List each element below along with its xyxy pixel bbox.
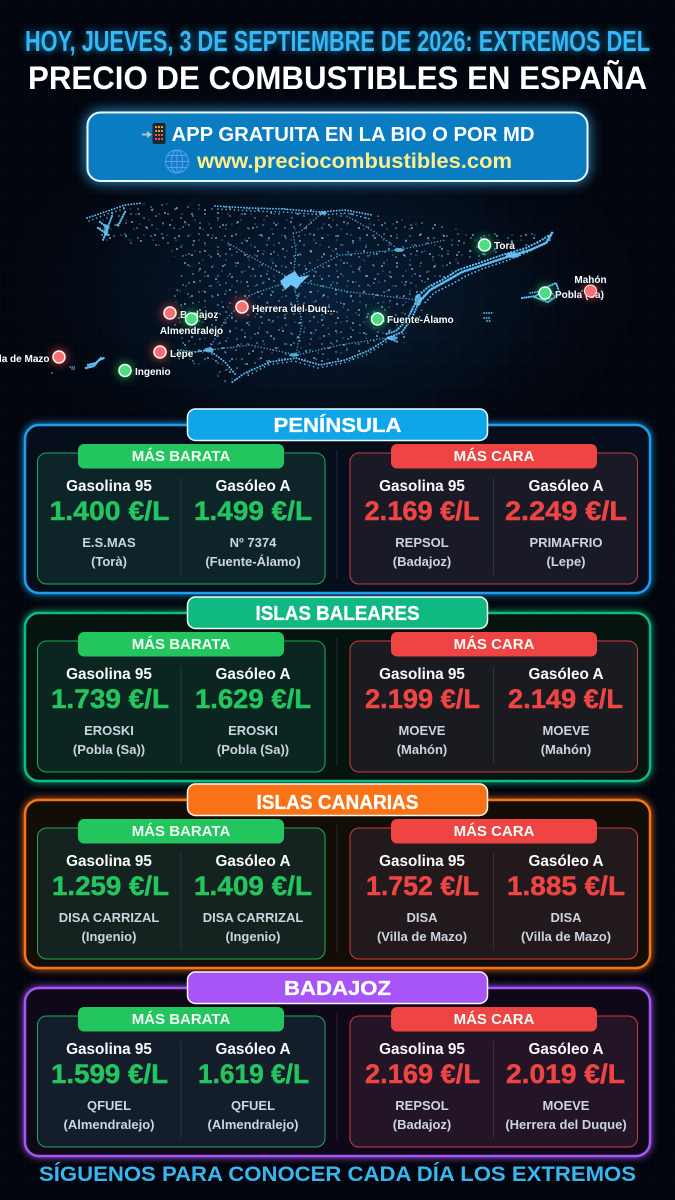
card: más cara: Gasóleo A bbox=[528, 1041, 604, 1058]
card: más cara bbox=[350, 444, 638, 584]
card: más cara: REPSOL bbox=[395, 535, 449, 550]
website url: www.preciocombustibles.com bbox=[196, 149, 512, 173]
marker: Almendralejo bbox=[160, 313, 223, 337]
card: más cara: MOEVE bbox=[399, 723, 446, 738]
card: más barata: 1.259 €/L bbox=[52, 871, 169, 901]
marker: Lepe bbox=[154, 346, 194, 360]
marker: Badajoz: Badajoz bbox=[180, 310, 218, 321]
card: más cara bbox=[350, 1007, 638, 1147]
title: PRECIO DE COMBUSTIBLES EN ESPAÑA bbox=[28, 60, 647, 96]
map of Spain with station markers bbox=[0, 200, 607, 390]
card: más cara: Gasolina 95 bbox=[379, 853, 465, 870]
card: más barata: (Pobla (Sa)) bbox=[217, 742, 289, 757]
card: más barata: (Almendralejo) bbox=[63, 1117, 155, 1132]
city glows: Madrid, Seville, Bilbao, Zaragoza, Valencia bbox=[280, 271, 310, 290]
icon: globe bbox=[166, 150, 188, 173]
card: más cara: (Villa de Mazo) bbox=[521, 929, 611, 944]
card: más barata: 1.400 €/L bbox=[50, 496, 170, 526]
card: más barata: EROSKI bbox=[228, 723, 278, 738]
card: más cara: (Lepe) bbox=[546, 554, 586, 569]
card: más cara: DISA bbox=[550, 910, 582, 925]
card: más cara: PRIMAFRIO bbox=[530, 535, 602, 550]
marker: Almendralejo: Almendralejo bbox=[160, 326, 223, 337]
panel: Islas Baleares bbox=[25, 597, 650, 781]
card: más barata: QFUEL bbox=[87, 1098, 131, 1113]
card: más cara: MOEVE bbox=[543, 1098, 590, 1113]
card: más barata: MÁS BARATA bbox=[132, 823, 230, 840]
card: más barata: 1.499 €/L bbox=[194, 496, 312, 526]
east coast points bbox=[419, 233, 552, 302]
card: más barata: MÁS BARATA bbox=[132, 448, 230, 465]
card: más cara: DISA bbox=[406, 910, 438, 925]
marker: Fuente-Álamo: Fuente-Álamo bbox=[387, 313, 454, 326]
card: más cara: MÁS CARA bbox=[454, 636, 535, 653]
card: más barata bbox=[38, 1007, 325, 1147]
card: más cara: 2.149 €/L bbox=[508, 684, 623, 714]
card: más cara: Gasóleo A bbox=[528, 478, 604, 495]
marker: Herrera del Duque bbox=[236, 301, 336, 315]
card: más barata: Gasóleo A bbox=[215, 853, 291, 870]
card: más cara: Gasóleo A bbox=[528, 666, 604, 683]
panel heading bbox=[188, 409, 488, 440]
panel heading: BADAJOZ bbox=[284, 977, 391, 1000]
card: más barata: EROSKI bbox=[84, 723, 134, 738]
card: más cara: (Herrera del Duque) bbox=[505, 1117, 627, 1132]
panel: Islas Canarias bbox=[25, 784, 650, 968]
card: más cara: 1.885 €/L bbox=[507, 871, 625, 901]
card: más barata: QFUEL bbox=[231, 1098, 275, 1113]
marker: Pobla (Sa) bbox=[539, 287, 604, 301]
card: más cara bbox=[350, 819, 638, 959]
card: más barata: 1.619 €/L bbox=[198, 1059, 309, 1089]
card: más cara: 2.249 €/L bbox=[505, 496, 627, 526]
marker: Ingenio bbox=[119, 364, 171, 378]
icon: phone with arrow bbox=[142, 123, 166, 144]
marker: Pobla (Sa): Pobla (Sa) bbox=[555, 290, 604, 301]
panel: Península bbox=[25, 409, 650, 593]
panel heading: PENÍNSULA bbox=[274, 414, 402, 437]
balearic islands bbox=[522, 283, 560, 302]
card: más cara: Gasolina 95 bbox=[379, 478, 465, 495]
card: más barata: 1.629 €/L bbox=[195, 684, 311, 714]
title bbox=[25, 26, 650, 96]
marker: Fuente-Álamo bbox=[372, 313, 454, 326]
card: más barata: Nº 7374 bbox=[230, 535, 277, 550]
panel heading bbox=[188, 784, 488, 816]
card: más barata: Gasolina 95 bbox=[66, 478, 152, 495]
card: más barata: (Almendralejo) bbox=[207, 1117, 299, 1132]
card: más barata: (Ingenio) bbox=[82, 929, 136, 944]
card: más barata: 1.739 €/L bbox=[51, 684, 169, 714]
panel frame bbox=[25, 988, 650, 1156]
panel frame bbox=[25, 425, 650, 593]
card: más cara: MÁS CARA bbox=[454, 823, 535, 840]
panel frame bbox=[25, 613, 650, 781]
card: más barata: Gasolina 95 bbox=[66, 853, 152, 870]
panel heading: ISLAS CANARIAS bbox=[256, 791, 418, 814]
card: más cara: MOEVE bbox=[543, 723, 590, 738]
card: más cara: 2.169 €/L bbox=[365, 1059, 480, 1089]
card: más barata: (Torà) bbox=[91, 554, 127, 569]
card: más cara: (Badajoz) bbox=[393, 1117, 451, 1132]
card: más cara: (Badajoz) bbox=[393, 554, 451, 569]
card: más cara: 1.752 €/L bbox=[366, 871, 479, 901]
marker: Lepe: Lepe bbox=[170, 349, 194, 360]
card: más barata: 1.599 €/L bbox=[51, 1059, 168, 1089]
card: más cara: MÁS CARA bbox=[454, 1011, 535, 1028]
road corridors bbox=[209, 212, 445, 355]
marker: Torà: Torà bbox=[494, 241, 515, 252]
card: más cara: MÁS CARA bbox=[454, 448, 535, 465]
card: más barata: Gasóleo A bbox=[215, 666, 291, 683]
footer call to action: SÍGUENOS PARA CONOCER CADA DÍA LOS EXTREMOS bbox=[39, 1163, 636, 1186]
card: más barata: (Pobla (Sa)) bbox=[73, 742, 145, 757]
card: más cara: 2.169 €/L bbox=[364, 496, 480, 526]
card: más cara: 2.199 €/L bbox=[365, 684, 480, 714]
card: más cara: Gasolina 95 bbox=[379, 666, 465, 683]
card: más barata: Gasolina 95 bbox=[66, 1041, 152, 1058]
app promo banner bbox=[88, 112, 588, 181]
card: más barata bbox=[38, 819, 325, 959]
card: más barata: DISA CARRIZAL bbox=[59, 910, 159, 925]
marker: Torà bbox=[478, 239, 515, 252]
card: más cara: REPSOL bbox=[395, 1098, 449, 1113]
card: más barata: Gasóleo A bbox=[215, 1041, 291, 1058]
app text: APP GRATUITA EN LA BIO O POR MD bbox=[172, 123, 534, 146]
map dots bbox=[52, 200, 596, 390]
card: más barata: (Fuente-Álamo) bbox=[205, 554, 301, 569]
marker: Villa de Mazo bbox=[0, 351, 65, 365]
card: más barata: E.S.MAS bbox=[82, 535, 136, 550]
marker: Ingenio: Ingenio bbox=[135, 367, 171, 378]
card: más barata: Gasolina 95 bbox=[66, 666, 152, 683]
card: más cara: 2.019 €/L bbox=[506, 1059, 625, 1089]
marker: Mahón bbox=[574, 275, 607, 297]
card: más cara: (Villa de Mazo) bbox=[377, 929, 467, 944]
card: más barata: Gasóleo A bbox=[215, 478, 291, 495]
card: más barata: (Ingenio) bbox=[226, 929, 280, 944]
card: más barata: DISA CARRIZAL bbox=[203, 910, 303, 925]
card: más cara bbox=[350, 632, 638, 772]
panel heading: ISLAS BALEARES bbox=[256, 602, 420, 625]
panel heading bbox=[188, 597, 488, 628]
card: más cara: Gasóleo A bbox=[528, 853, 604, 870]
panel: Badajoz bbox=[25, 972, 650, 1156]
marker: Badajoz bbox=[164, 307, 218, 321]
card: más cara: (Mahón) bbox=[397, 742, 447, 757]
marker: Mahón: Mahón bbox=[574, 275, 607, 286]
north and south coast points bbox=[87, 203, 372, 218]
panel frame bbox=[25, 800, 650, 968]
card: más barata: 1.409 €/L bbox=[194, 871, 312, 901]
card: más barata bbox=[38, 444, 325, 584]
card: más barata: MÁS BARATA bbox=[132, 1011, 230, 1028]
marker: Herrera del Duque: Herrera del Duq... bbox=[252, 304, 336, 315]
card: más barata bbox=[38, 632, 325, 772]
canary islands bbox=[86, 358, 104, 368]
panel heading bbox=[188, 972, 488, 1004]
card: más cara: Gasolina 95 bbox=[379, 1041, 465, 1058]
card: más cara: (Mahón) bbox=[541, 742, 591, 757]
card: más barata: MÁS BARATA bbox=[132, 636, 230, 653]
